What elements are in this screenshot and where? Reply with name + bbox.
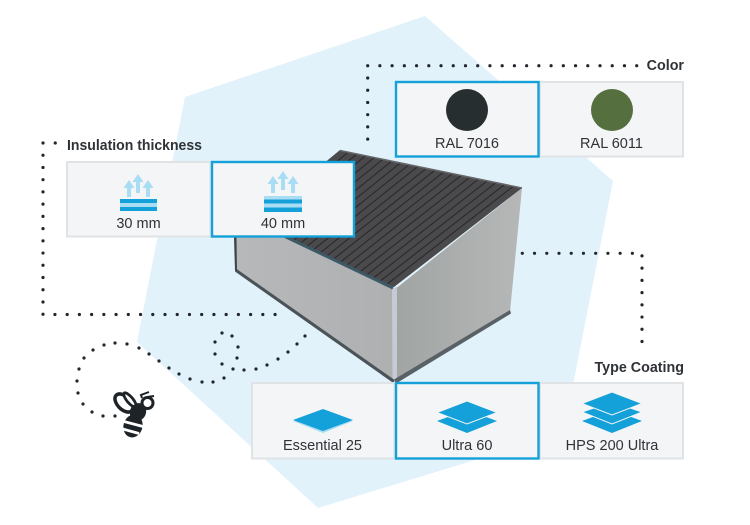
thorax: [127, 400, 149, 424]
icon: insulation 40 mm: [264, 171, 302, 212]
building: [233, 150, 522, 384]
panel: insulation thickness: [67, 138, 354, 236]
option: 30 mm: [67, 162, 210, 236]
stripes: [121, 421, 143, 434]
heading: type coating: Type Coating: [594, 360, 684, 376]
right wall: [394, 188, 522, 382]
option: Essential 25: [252, 383, 394, 458]
option: 40 mm selected: [212, 162, 354, 236]
abdomen: [121, 412, 145, 440]
option: RAL 6011: [540, 82, 683, 156]
option: Essential 25: Essential 25: [283, 438, 362, 454]
corner highlight: [392, 287, 397, 382]
wings: [112, 391, 136, 415]
icon: insulation 30 mm: [120, 174, 157, 211]
option: HPS 200 Ultra: HPS 200 Ultra: [566, 438, 659, 454]
panel: color: [396, 58, 684, 156]
dotted connector: color: [368, 66, 637, 151]
gutter: [285, 236, 393, 288]
ridge edge: [340, 150, 522, 188]
option: 30 mm: 30 mm: [116, 216, 161, 232]
roof: [254, 150, 522, 287]
right base strip: [394, 310, 511, 384]
heading: insulation thickness: Insulation thickness: [67, 138, 202, 154]
left base strip: [235, 268, 394, 384]
dotted connector: insulation: [43, 143, 276, 314]
background polygon: [137, 16, 613, 508]
option: RAL 7016 selected: [396, 82, 538, 156]
roof ribs: [261, 152, 513, 284]
antennae: [141, 392, 154, 398]
icon: three layers: [582, 392, 642, 433]
panel: type coating: [252, 360, 684, 458]
dotted bee trail: [77, 333, 305, 416]
option: HPS 200 Ultra: [540, 383, 683, 458]
heading: color: Color: [647, 58, 684, 74]
option: RAL 6011: RAL 6011: [580, 136, 643, 152]
head: [142, 398, 153, 408]
dotted connector: coating: [522, 253, 642, 350]
icon: bee: [112, 391, 154, 440]
left wall: [235, 205, 394, 382]
option: Ultra 60 selected: Ultra 60: [442, 438, 492, 454]
option: Ultra 60 selected: [396, 383, 538, 458]
icon: two layers: [437, 401, 497, 433]
option: 40 mm selected: 40 mm: [261, 216, 305, 232]
left edge trim: [233, 205, 237, 271]
option: RAL 7016 selected: RAL 7016: [435, 136, 499, 152]
icon: one layer: [293, 409, 353, 433]
